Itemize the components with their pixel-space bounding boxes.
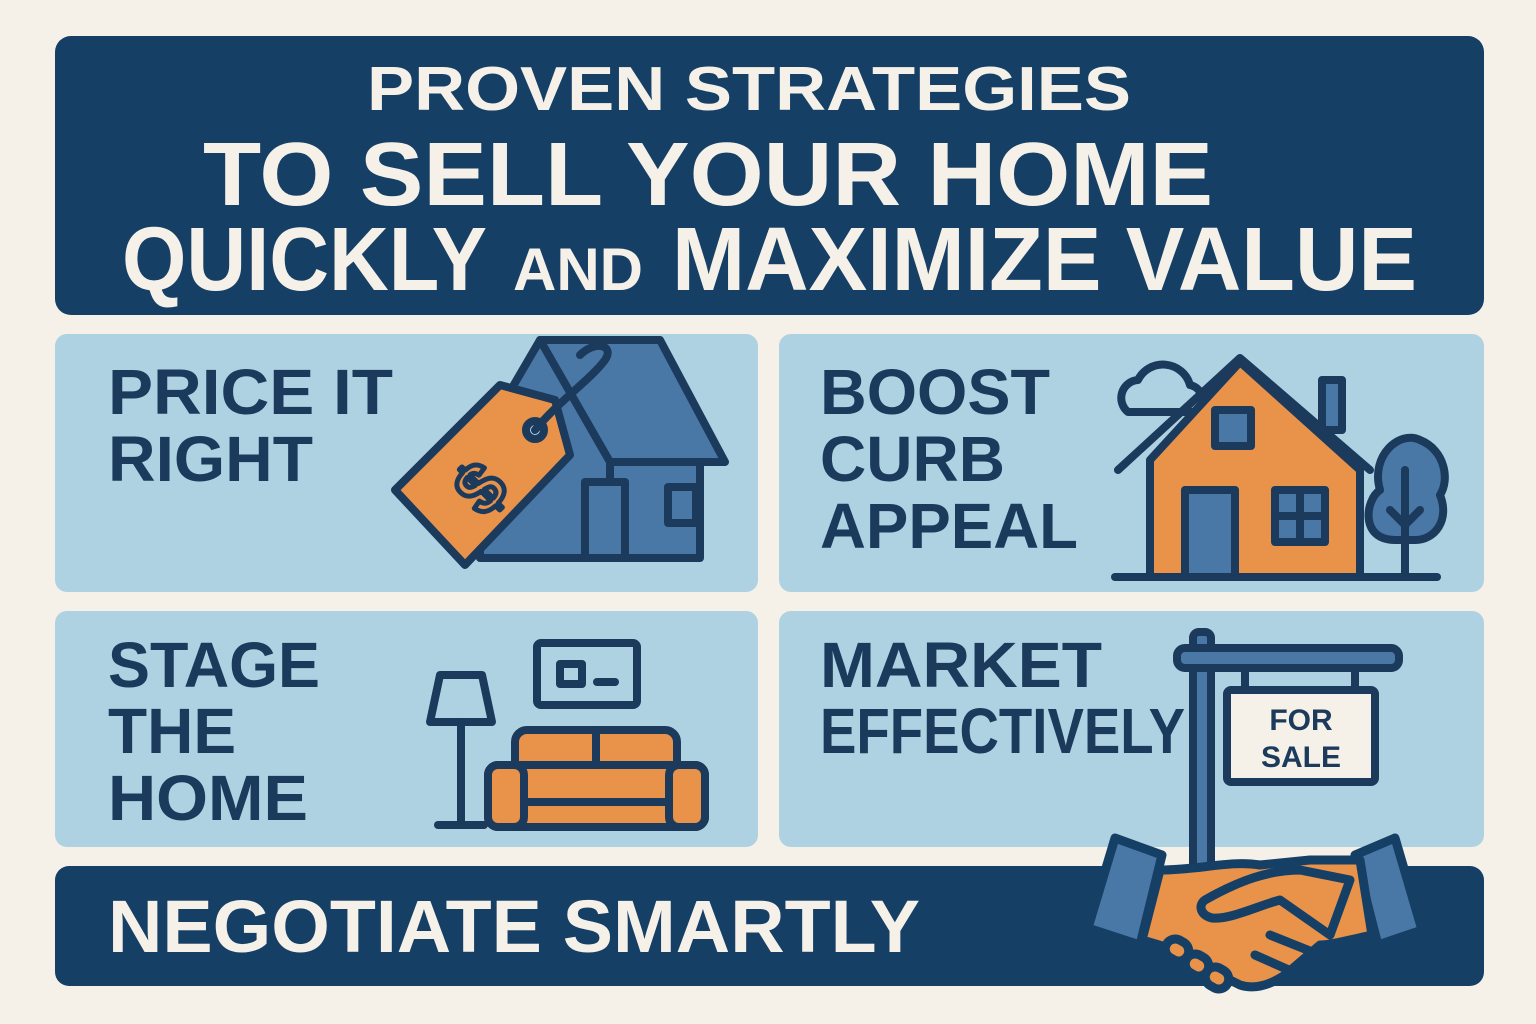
heading: market effectively: EFFECTIVELY <box>820 695 1185 767</box>
heading: price it right: PRICE IT <box>108 356 393 428</box>
icon: house with price tag <box>395 340 725 565</box>
icon: for sale sign <box>1177 632 1399 932</box>
icon: for sale sign: SALE <box>1261 741 1341 774</box>
heading: stage the home: THE <box>108 695 236 767</box>
heading: price it right: RIGHT <box>108 423 313 495</box>
title line 3: MAXIMIZE VALUE <box>672 210 1417 310</box>
icon: house with price tag: $ <box>439 447 522 529</box>
heading: boost curb appeal: APPEAL <box>820 490 1078 562</box>
heading: boost curb appeal: BOOST <box>820 356 1050 428</box>
heading: boost curb appeal: CURB <box>820 423 1005 495</box>
panel: boost curb appeal <box>779 334 1484 592</box>
heading: negotiate smartly: NEGOTIATE SMARTLY <box>108 885 920 968</box>
heading: stage the home: STAGE <box>108 629 320 701</box>
title line 2: TO SELL YOUR HOME <box>203 125 1213 225</box>
title line 3: QUICKLY <box>122 210 487 310</box>
panel: price it right <box>55 334 758 592</box>
heading: market effectively: MARKET <box>820 629 1102 701</box>
panel: negotiate smartly bar <box>55 866 1484 986</box>
icon: for sale sign: FOR <box>1269 704 1333 737</box>
title line 1: PROVEN STRATEGIES <box>367 55 1131 124</box>
heading: stage the home: HOME <box>108 762 308 834</box>
icon: handshake <box>1088 838 1422 993</box>
title panel <box>55 36 1484 315</box>
title line 3: AND <box>513 236 643 303</box>
icon: lamp, frame and sofa <box>430 643 705 827</box>
panel: stage the home <box>55 611 758 847</box>
icon: orange house with tree and cloud <box>1115 358 1445 577</box>
panel: market effectively <box>779 611 1484 932</box>
